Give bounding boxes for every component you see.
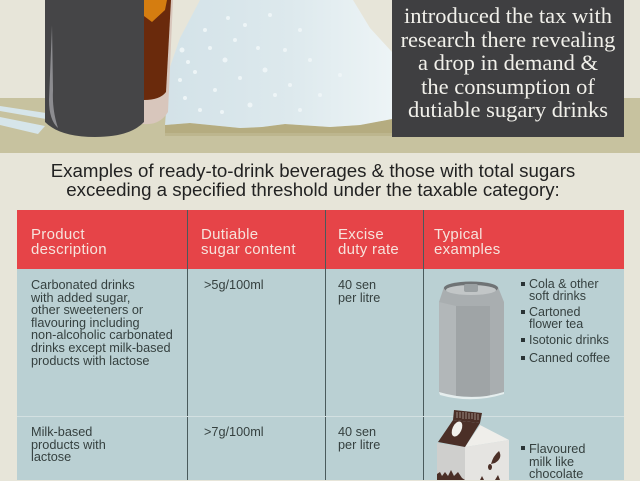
table	[17, 210, 624, 480]
shelf	[0, 98, 640, 153]
row 1 description: Carbonated drinks with added sugar, other sweeteners or flavouring including non-alcoholic carbonated drinks except milk-based products with lactose	[31, 278, 173, 368]
row 1 sugar: >5g/100ml	[204, 278, 264, 292]
hero illustration: can, glass, sugar heap on a shelf	[0, 0, 640, 153]
table header band	[17, 210, 624, 269]
sugar spill on shelf	[0, 106, 46, 134]
row 2 description: Milk-based products with lactose	[31, 425, 106, 464]
intro heading: Examples of ready-to-drink beverages & those with total sugars exceeding a specified threshold under the taxable category:	[51, 160, 575, 200]
row 1 bullet list: Cartoned flower tea	[529, 305, 583, 330]
glass of cola	[140, 0, 173, 124]
row 1 bullet list	[521, 277, 610, 365]
row divider	[17, 416, 624, 417]
row 2 bullet list: Flavoured milk like chocolate	[529, 442, 585, 481]
column line	[325, 210, 326, 480]
icon: grey can	[439, 282, 504, 400]
row 2 rate: 40 sen per litre	[338, 425, 380, 452]
row 1 bullet list: Isotonic drinks	[529, 333, 609, 347]
row 2 sugar: >7g/100ml	[204, 425, 264, 439]
icon: milk carton	[437, 410, 509, 480]
header: product: Product description	[31, 226, 107, 258]
dark can	[45, 0, 144, 137]
dark text box	[392, 0, 624, 137]
row 1 bullet list: Canned coffee	[529, 351, 610, 365]
header: examples: Typical examples	[434, 226, 501, 258]
sugar heap	[165, 0, 392, 128]
header: rate: Excise duty rate	[338, 226, 399, 258]
row 1 bullet list: Cola & other soft drinks	[529, 277, 598, 302]
column line	[423, 210, 424, 480]
column line	[187, 210, 188, 480]
row 1 rate: 40 sen per litre	[338, 278, 380, 305]
header: sugar: Dutiable sugar content	[201, 226, 296, 258]
